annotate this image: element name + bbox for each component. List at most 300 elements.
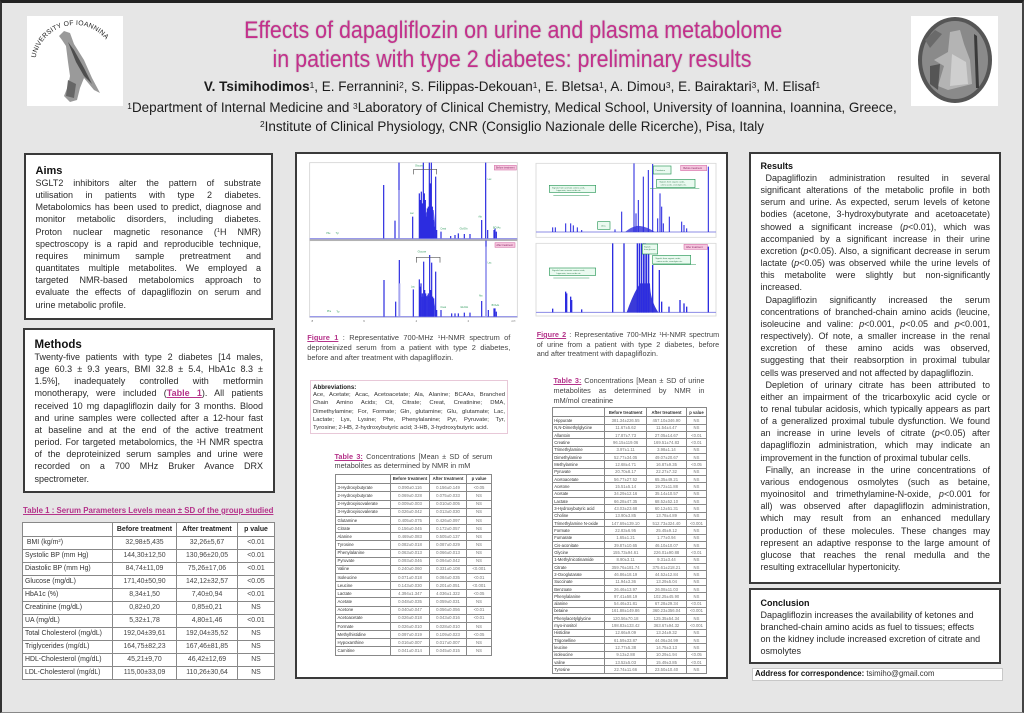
chart: figure 1 serum NMR spectra: Lac [488,179,492,181]
table: urine metabolites: Allantoin [554,433,570,438]
table 1: serum parameters [22,522,275,680]
panel: conclusion [749,588,1001,664]
table: serum metabolites: 0.010±0.005 [436,501,460,506]
table: serum metabolites: 0.069±0.028 [398,493,422,498]
chart: figure 2 urine NMR spectra: Signals from aromatic amino acids, [552,269,585,272]
text: aims: urine metabolic profile. [36,300,126,310]
table: urine metabolites: 12.77±5.38 [615,645,636,650]
table: serum metabolites: NS [476,542,482,547]
table: urine metabolites: Benzoate [554,586,572,592]
table: serum metabolites: <0.001 [472,583,486,588]
table: urine metabolites: 20.70±8.17 [615,469,636,474]
table: urine metabolites: Glycine [554,550,568,555]
table: urine metabolites: 65.35±49.21 [655,477,678,482]
table: urine metabolites: <0.01 [691,550,702,555]
table 1: serum parameters: 45,21±9,70 [127,656,162,663]
table: urine metabolites: 22.74±11.66 [614,667,637,672]
table: urine metabolites: <0.01 [691,601,702,606]
text: results: myoinositol and trimethylamine-N-oxide, p<0.001 for [760,489,990,499]
table: urine metabolites: Pyruvate [554,469,571,474]
table: serum metabolites: NS [476,648,482,653]
text: methods: received 10 mg dapagliflozin daily for 3 months. Blood [34,401,263,411]
chart: figure 1 serum NMR spectra: 2 [468,321,470,323]
table 1: serum parameters: NS [251,669,261,676]
table: serum metabolites: NS [476,493,482,498]
table: urine metabolites: 26.08±11.03 [655,586,678,592]
box: abbreviations: Abbreviations: [313,384,356,390]
text: methods: at baseline and at the end of the active treatment [34,425,263,435]
chart: figure 2 urine NMR spectra: amino acids, osmolytes etc. [657,260,683,263]
chart: figure 2 urine NMR spectra: Before treatment [683,167,702,170]
table: urine metabolites: Choline [554,513,568,518]
table 1: serum parameters: NS [251,643,261,650]
table: urine metabolites: 49.07±20.67 [655,455,678,460]
table: urine metabolites: NS [694,447,699,452]
table: urine metabolites: NS [694,557,699,562]
table 1: serum parameters: 115,00±33,09 [124,669,165,676]
table: urine metabolites: 39.87±10.65 [614,543,637,548]
chart: figure 1 serum NMR spectra: Lac [488,262,492,264]
table: urine metabolites: 54.46±31.81 [614,601,637,606]
text: results: to renal tubular acidosis, which typically appears as part [760,404,990,414]
table 1: serum parameters: Systolic BP (mm Hg) [25,552,88,559]
table: urine metabolites: Histidine [554,630,570,635]
table: serum metabolites: 0.097±0.019 [398,632,422,637]
text: methods [34,352,263,484]
text: conclusion: on the kidney include increased excretion of citrate and [760,634,980,644]
table: urine metabolites: 14.75±3.13 [656,645,677,650]
table: urine metabolites: 68.52±52.10 [655,499,678,504]
text: results: various endogenous osmolytes (such as betaine, [760,477,990,487]
table: urine metabolites: Acetone [554,484,570,489]
table: urine metabolites: Citrate [554,565,567,570]
table: serum metabolites: 0.026±0.042 [398,509,422,514]
table: serum metabolites: 2-Hydroxyisovalerate [338,501,378,506]
text: results: respectively). Of note, a smaller increase in the renal [760,331,990,341]
table title: serum metabolites: Table 3: Concentrations [Mean ± SD of serum [334,452,492,460]
table: urine metabolites: NS [694,586,699,592]
table: serum metabolites: Citrate [338,526,350,531]
table: serum metabolites: After treatment [433,476,463,481]
table: urine metabolites: <0.05 [691,462,702,467]
table: serum metabolites: Acetone [338,607,353,612]
text: aims: targeted NMR-based metabolomics approach to [36,275,261,285]
table: serum metabolites: 0.028±0.010 [436,624,460,629]
table: urine metabolites: 9.13±2.88 [616,652,635,657]
table: urine metabolites: 44.52±12.84 [655,572,678,577]
table: serum metabolites: 4.394±1.347 [398,591,422,596]
table: serum metabolites: NS [476,550,482,555]
table: urine metabolites: NS [694,499,699,504]
title [244,17,782,73]
table: serum metabolites: 0.156±0.045 [398,526,422,531]
table: urine metabolites: 46.86±18.19 [614,572,637,577]
table: serum metabolites: 0.066±0.013 [436,550,460,555]
table: serum metabolites: Phenylalanine [338,550,364,555]
table: serum metabolites: 0.041±0.014 [398,648,422,653]
table: urine metabolites: 11.54±4.47 [656,425,677,430]
chart: figure 1 serum NMR spectra: Glucose [415,166,424,168]
table: serum metabolites: NS [476,526,482,531]
chart: figure 2 urine NMR spectra: Signals [644,246,651,248]
table: urine metabolites: NS [694,565,699,570]
table: urine metabolites: Tyrosine [554,667,570,672]
text: aims: requires minimum sample pretreatment and [36,251,261,261]
box: abbreviations: Ace, Acetate; Acac, Acetoacetate; Ala, Alanine; BCAAs, Branched [313,392,505,398]
table: serum metabolites: Hypoxanthine [338,640,364,645]
text: results: showed a significant increase (p<0.01), which was [760,222,990,232]
text: results: cells was preserved and not affected by dapagliflozin. [760,368,973,378]
table: urine metabolites: 9.31±3.44 [657,557,676,562]
heading: methods: Methods [34,338,82,350]
table: serum metabolites: 0.013±0.030 [436,509,460,514]
text: methods: age 60.3 ± 9.3 years, BMI 32.8 ± 5.4, HbA1c 8.3 ± [34,364,263,374]
table: serum metabolites: 0.093±0.046 [398,558,422,563]
table: urine metabolites: NS [694,528,699,533]
table: urine metabolites: NS [694,572,699,577]
text: results: either an impairment of the tricarboxylic acid cycle or [760,392,990,402]
text: methods: 1.5%], inadequately controlled with metformin [34,376,263,386]
text: aims: quantitates multiple metabolites. We employed a [36,263,261,273]
table: urine metabolites: 155.73±94.61 [613,550,638,555]
table: urine metabolites: 8.90±3.11 [616,557,635,562]
text: results: Finally, an increase in the urine concentrations of [766,465,990,475]
table: serum metabolites: Glutamine [338,518,357,522]
table 1: serum parameters: Total Cholesterol (mg/dL) [25,630,102,637]
table: urine metabolites: <0.05 [691,652,702,657]
table: serum metabolites: NS [476,624,482,629]
table: urine metabolites: 60.12±51.31 [655,506,678,511]
table: urine metabolites: Creatine [554,440,570,445]
table: serum metabolites: Alanine [338,534,352,539]
table: urine metabolites: 43.03±23.68 [614,506,637,511]
table: urine metabolites: 66.28±47.35 [614,499,637,504]
table: serum metabolites: 3-Hydroxyisovalerate [338,509,378,514]
table: urine metabolites: NS [694,616,699,621]
chart: figure 1 serum NMR spectra: ppm [512,320,516,322]
table 1: serum parameters: Creatinine (mg/dL) [25,604,82,611]
table: serum metabolites: 0.059±0.031 [436,599,460,604]
table: serum metabolites: 0.040±0.047 [398,607,422,612]
text: results: Dapagliflozin administration resulted in several [766,173,990,183]
text: conclusion [760,610,980,656]
chart: figure 1 serum NMR spectra: Tyr [336,311,340,314]
table: urine metabolites: 161.88±149.86 [612,608,640,613]
table: urine metabolites: NS [694,543,699,548]
table: urine metabolites: NS [694,484,699,489]
table 1: serum parameters: Diastolic BP (mm Hg) [25,565,91,572]
table: urine metabolites: NS [694,579,699,584]
table: serum metabolites: NS [476,534,482,539]
logo: University of Ioannina: UNIVERSITY OF IOANNINA [31,20,108,58]
table 1: serum parameters: Glucose (mg/dL) [25,578,76,585]
table: urine metabolites: 226.01±90.88 [654,550,679,555]
table: serum metabolites: 0.071±0.018 [398,575,422,580]
table: serum metabolites: 4.036±1.322 [436,591,460,596]
chart: figure 2 urine NMR spectra: Signals from organic acids, [659,181,685,184]
table 1: serum parameters: 0,82±0,20 [129,604,160,611]
text: results: this metabolite were slightly but non-significantly [760,270,990,280]
table: urine metabolites: p value [689,410,704,415]
table: urine metabolites: NS [694,630,699,635]
table: urine metabolites: Phenylacetylglycine [554,616,591,621]
table: serum metabolites: Isoleucine [338,575,357,580]
table 1: serum parameters: <0.01 [247,539,265,546]
chart: figure 1 serum NMR spectra: Lac [411,286,416,288]
panel: aims [24,153,273,320]
text: aims: spectroscopy is a rapid and reproducible technique, [36,239,261,249]
table: serum metabolites: <0.05 [474,591,484,596]
table: urine metabolites: 169.51±74.83 [654,440,679,445]
table: serum metabolites: 0.094±0.042 [436,558,460,563]
table: serum metabolites: Acetate [338,599,352,604]
table: urine metabolites: 26.46±13.97 [614,586,637,592]
table: urine metabolites: 22.83±6.95 [615,528,636,533]
table: urine metabolites: Hippurate [554,418,572,423]
table: urine metabolites: Dimethylamine [554,455,582,460]
table 1: serum parameters: After treatment [182,526,232,532]
table: serum metabolites: Tyrosine [338,542,354,547]
table: urine metabolites: Acetoacetate [554,477,579,482]
table: urine metabolites: 512.73±324.40 [652,521,680,526]
chart: figure 2 urine NMR spectra: hippurate, trans-acids etc. [557,272,582,275]
table: urine metabolites: 13.52±5.03 [615,660,636,665]
chart: figure 1 serum NMR spectra: Creat [440,306,446,309]
table: serum metabolites: 0.240±0.060 [398,566,422,571]
text: results: lactate (p<0.05) was observed while the urine levels of [760,258,990,268]
table: urine metabolites: 10.29±1.94 [656,652,677,657]
table 1: serum parameters: <0.01 [247,565,265,572]
table 1: serum parameters: 110,26±30,64 [186,669,228,676]
table: serum metabolites: <0.05 [474,632,484,637]
table: serum metabolites: 0.016±0.007 [398,640,422,645]
logo: ancient coin [911,16,998,106]
table: serum metabolites: Methylhistidine [338,632,366,637]
table: urine metabolites: Fumarate [554,535,572,540]
text: aims [36,178,261,310]
table: urine metabolites: NS [694,667,699,672]
table 1: serum parameters: 84,74±11,09 [126,565,163,572]
table: serum metabolites: NS [476,558,482,563]
text: results: production of these molecules. These changes may [760,526,990,536]
table: urine metabolites: After treatment [651,410,681,415]
authors: V. Tsimihodimos1, E. Ferrannini2, S. Filippas-Dekouan1, E. Bletsa1, A. Dimou3, E. Bairaktari3, M. Elisaf1 [204,79,820,94]
table: urine metabolites: NS [694,425,699,430]
text: conclusion: osmolytes [760,646,801,656]
table: urine metabolites: 44.06±34.99 [655,638,678,643]
table: urine metabolites: Trigonelline [554,638,576,643]
table 1: serum parameters: NS [251,630,261,637]
table 1: serum parameters: 192,04±39,61 [123,630,166,637]
chart: figure 1 serum NMR spectra: After treatment [496,244,513,247]
caption: figure 2: and after treatment with dapagliflozin. [537,349,658,358]
text: results: represent an adaptive response to the large amount of [760,538,990,548]
table: urine metabolites: 11.94±3.36 [615,579,636,584]
text: results: improvement in the function of proximal tubular cells. [760,453,971,463]
table: serum metabolites: <0.01 [474,575,484,580]
table: urine metabolites: <0.001 [690,521,703,526]
table: urine metabolites: Before treatment [609,410,642,415]
table 1: serum parameters: 167,46±81,85 [186,643,228,650]
chart: figure 2 urine NMR spectra: After treatment [686,246,703,249]
table title: urine metabolites [554,376,704,404]
table 1: serum parameters: 75,26±17,06 [188,565,226,572]
table: urine metabolites: 457.10±346.90 [652,418,680,423]
table: urine metabolites: 12.68±4.71 [615,462,636,467]
chart: figure 1 serum NMR spectra: Ala [478,216,482,219]
table: urine metabolites: NS [694,455,699,460]
box: address for correspondence [752,668,1003,680]
table: urine metabolites: <0.001 [690,623,703,628]
table: urine metabolites: 3.97±1.11 [616,447,635,452]
table 1: serum parameters: NS [251,656,261,663]
table: serum metabolites: NS [476,518,482,522]
title: Effects of dapagliflozin on urine and plasma metabolome [244,17,782,44]
table 1: serum parameters: BMI (kg/m2) [27,538,63,546]
table: serum metabolites: 0.201±0.051 [436,583,460,588]
table: urine metabolites: 13.90±3.85 [615,513,636,518]
table: serum metabolites: 0.026±0.018 [398,615,422,620]
table: serum metabolites: NS [476,599,482,604]
table: urine metabolites: NS [694,469,699,474]
chart: figure 1 serum NMR spectra: Ala [479,295,483,298]
caption: figure 1: before and after treatment with dapagliflozin. [307,353,453,362]
table 1: serum parameters: 142,12±32,57 [186,578,228,585]
table: serum metabolites: 0.056±0.056 [436,607,460,612]
table: urine metabolites: Acetate [554,491,568,496]
table: urine metabolites: NS [694,477,699,482]
table: serum metabolites: 0.143±0.030 [398,583,422,588]
text: results: resulting extracellular hypertonicity. [760,562,900,572]
table: serum metabolites: 0.048±0.035 [398,599,422,604]
logo: University of Ioannina [27,16,123,106]
table: urine metabolites: NS [694,506,699,511]
table: urine metabolites: Methylamine [554,462,578,467]
chart: figure 1 serum NMR spectra: Phe [327,311,332,313]
heading: conclusion: Conclusion [760,598,810,608]
table: urine metabolites: 27.05±14.67 [655,433,678,438]
table 1: serum parameters: <0.01 [247,552,265,559]
table: urine metabolites: 22.27±7.32 [656,469,677,474]
table 1: serum parameters: 0,85±0,21 [192,604,222,611]
chart: figure 2 urine NMR spectra: Signals from organic acids, [655,257,681,260]
table: urine metabolites: 147.69±139.10 [612,521,640,526]
table: serum metabolites: 0.090±0.116 [398,485,422,490]
table 1: serum parameters: 32,98±5,435 [125,539,164,546]
text: results: serum and urine. As expected, serum levels of ketone [760,197,990,207]
text: results: dapagliflozin administration, which may indicate an [760,440,990,450]
text: results: increased. [760,282,802,292]
table: urine metabolites: Cis-aconitate [554,543,579,548]
table: serum metabolites: 0.405±0.075 [398,518,422,522]
table title: urine metabolites: metabolites as determined by NMR in [554,386,704,394]
text: results [760,173,990,572]
text: aims: SGLT2 inhibitors alter the pattern of substrate [36,178,261,188]
table: urine metabolites: 125.35±54.34 [654,616,679,621]
heading: results: Results [760,161,793,171]
chart: figure 2 urine NMR spectra: Signals from aromatic amino acids, [552,186,585,189]
chart: figure 1 serum NMR spectra [309,162,518,323]
chart: figure 1 serum NMR spectra: Glu/Gln [460,307,469,309]
table: serum metabolites: 0.505±0.137 [436,534,460,539]
table: serum metabolites: 0.063±0.013 [398,550,422,555]
table: serum metabolites: 0.087±0.029 [436,542,460,547]
text: results: glucose that reaches the renal medulla and the [760,550,990,560]
panel: methods [23,328,275,493]
table: urine metabolites: 198.83±133.42 [612,623,640,628]
table 1: serum parameters: 5,32±1,78 [129,617,160,624]
table: serum metabolites: NS [476,509,482,514]
table: urine metabolites: 13.29±5.04 [656,579,677,584]
table: serum metabolites: 0.075±0.033 [436,493,460,498]
table: urine metabolites: 34.29±12.16 [614,491,637,496]
table: urine metabolites: leucine [554,645,567,650]
table 1: serum parameters: 4,80±1,46 [192,617,222,624]
table 1: serum parameters: LDL-Cholesterol (mg/dL) [25,669,100,676]
table: urine metabolites: 13.78±4.89 [656,513,677,518]
table: urine metabolites: 3.98±1.14 [657,447,676,452]
chart: figure 2 urine NMR spectra: amino acids, osmolytes etc. [661,184,687,187]
table: urine metabolites: 35.14±10.57 [655,491,678,496]
table: serum metabolites: 0.009±0.003 [398,501,422,506]
caption: figure 1: deproteinized serum from a patient with type 2 diabetes, [307,343,510,352]
table: urine metabolites: 1-Methylnicotinamide [554,557,594,562]
text: results: significant alterations of the metabolic profile in both [760,185,990,195]
table title: serum metabolites [334,452,492,470]
text: aims: Proton nuclear magnetic resonance (1H NMR) [36,227,261,237]
table 1: serum parameters: 130,96±20,05 [186,552,228,559]
table: serum metabolites: NS [476,640,482,645]
title: in patients with type 2 diabetes: preliminary results [273,46,751,73]
table: urine metabolites: 97.41±58.19 [614,594,637,599]
table: urine metabolites: 12.66±9.09 [615,630,636,635]
chart: figure 1 serum NMR spectra: Tyr [336,232,339,235]
caption: figure 2: Figure 2 : Representative 700-MHz 1H-NMR spectrum [537,330,719,339]
table 1: serum parameters: 144,30±12,50 [123,552,166,559]
table: urine metabolites: NS [694,645,699,650]
table: serum metabolites: 0.045±0.015 [436,648,460,653]
panel: results [749,152,1001,584]
table: serum metabolites: 0.156±0.149 [436,485,460,490]
table: urine metabolites: 67.28±29.34 [655,601,678,606]
affiliations: 2Institute of Clinical Physiology, CNR (Consiglio Nazionale delle Ricerche), Pisa, Italy [260,119,764,134]
text: conclusion: branched-chain amino acids as fuel to tissues; effects [760,622,974,632]
text: methods: and urine samples were collected after a 12-hour fast [34,413,263,423]
table: urine metabolites: myo-inositol [554,623,577,628]
table: urine metabolites: Trimethylamine [554,447,583,452]
table: urine metabolites: 15.51±5.14 [615,484,636,489]
table: urine metabolites: 19.72±11.88 [655,484,678,489]
caption: figure 1: Figure 1 : Representative 700-MHz 1H-NMR spectrum of [307,333,510,342]
table 1: serum parameters: 32,26±5,67 [190,539,224,546]
chart: figure 1 serum NMR spectra: Creat [440,227,446,230]
table 1: serum parameters: <0.01 [247,617,265,624]
chart: figure 1 serum NMR spectra: 4 [416,321,418,323]
table: urine metabolites: NS [694,491,699,496]
table: urine metabolites: 96.15±119.06 [613,440,638,445]
table: urine metabolites: 46.10±10.07 [655,543,678,548]
table 1: serum parameters: <0.05 [247,578,265,585]
table 1 title: Table 1 : Serum Parameters Levels mean ± SD of the group studied [22,505,273,515]
table 1: serum parameters: <0.01 [247,591,265,598]
box: address for correspondence: Address for correspondence: tsimiho@gmail.com [755,669,934,678]
panel: central figures and tables [295,152,728,679]
table: serum metabolites: Pyruvate [338,558,354,563]
table: urine metabolites: betaine [554,608,568,613]
text: aims: utilisation in patients with type 2 diabetes. [36,190,261,200]
table: serum metabolites: Carnitine [338,648,355,653]
table: urine metabolites: <0.001 [690,608,703,613]
